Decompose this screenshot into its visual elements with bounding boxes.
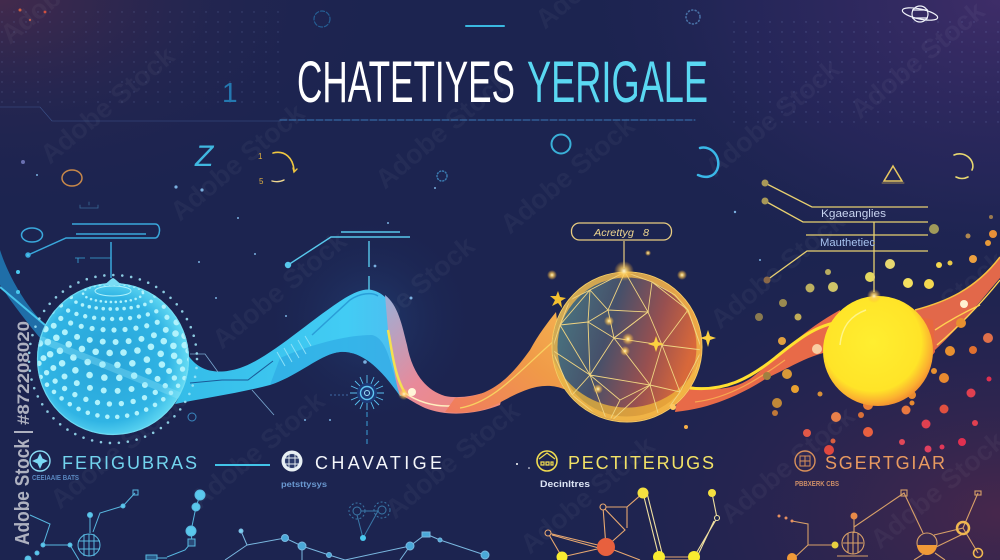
watermark: Adobe Stock [495, 110, 641, 240]
dots: around yellow sphere [755, 215, 997, 455]
icon: network globe [78, 534, 100, 556]
callout: blue sphere [22, 224, 160, 278]
watermark: Adobe Stock [165, 97, 311, 227]
label: pectiterugs: PECTITERUGS [568, 453, 714, 473]
sphere: gold geodesic globe [552, 272, 702, 424]
network: left cyan [25, 490, 138, 560]
ribbon: right tail [915, 257, 1000, 350]
label: chavatige [281, 450, 442, 489]
icon: burst marker [330, 375, 384, 445]
icon: half filled node [917, 533, 937, 555]
callout: blue wave peak [286, 232, 410, 290]
watermark: Adobe Stock [370, 65, 516, 195]
stock id side text: #872208020 [14, 321, 33, 425]
network: yellow and orange [545, 488, 720, 560]
label: sgertgiar [795, 451, 945, 488]
network: right orange [778, 490, 982, 560]
icon: sgertgiar emblem [795, 451, 815, 471]
connector between labels [215, 464, 270, 466]
floating glyphs and arcs: 1 [258, 152, 263, 161]
watermark: Adobe Stock [700, 53, 846, 183]
title: YERIGALE [527, 50, 708, 115]
callout: yellow sphere legend: Kgaeanglies [821, 208, 887, 220]
watermark: Adobe Stock [380, 395, 526, 525]
label: ferigubras [30, 451, 197, 482]
label: chavatige: CHAVATIGE [315, 453, 442, 473]
icon: pectiterugs emblem [537, 451, 557, 471]
icon: network globe orange [837, 532, 868, 556]
ribbon: orange rising wave [445, 312, 566, 413]
watermark: Adobe Stock [45, 385, 191, 515]
watermark: Adobe Stock [515, 430, 661, 560]
ribbon: pink and yellow transition [385, 295, 505, 414]
network: small triad [349, 502, 390, 541]
watermark: Adobe Stock [705, 205, 851, 335]
network: wide blue chain [225, 529, 489, 560]
title rule and header decorations: 1 [222, 77, 238, 108]
callout: gold sphere label: Acrettyg 8 [593, 228, 649, 239]
title: CHATETIYES [297, 50, 515, 115]
icon: planet [901, 5, 939, 23]
callout: yellow sphere legend: Mauthetiec [820, 237, 876, 249]
ribbon: yellow to sphere [675, 310, 845, 412]
callout: gold sphere label [572, 223, 672, 268]
ribbon: blue wave [175, 289, 420, 415]
watermark: Adobe Stock [715, 400, 861, 530]
label: pectiterugs: Decinltres [540, 479, 590, 490]
icon: ferigubras star [30, 451, 50, 471]
sphere: yellow [823, 289, 935, 406]
label: sgertgiar: SGERTGIAR [825, 453, 945, 473]
watermark: Adobe Stock [335, 230, 481, 360]
floating glyphs and arcs [62, 134, 973, 208]
stream: upper left [0, 250, 45, 338]
watermark: Adobe Stock [185, 385, 331, 515]
label: ferigubras: FERIGUBRAS [62, 453, 197, 473]
title rule and header decorations [0, 10, 700, 121]
label: sgertgiar: PBBXERK CBS [795, 481, 839, 488]
label: ferigubras: CEEIAAIE BATS [32, 475, 79, 482]
stock id side text [12, 321, 34, 545]
label: chavatige: petsttysys [281, 480, 328, 489]
scattered stars [18, 8, 761, 421]
icon: chavatige globe [282, 450, 302, 472]
network: vertical chain [146, 490, 205, 560]
label: pectiterugs [516, 451, 714, 490]
sphere: blue dotted globe [28, 274, 198, 444]
watermark: Adobe Stock [35, 40, 181, 170]
floating glyphs and arcs: 5 [259, 177, 264, 186]
callout: yellow sphere legend [762, 180, 928, 292]
floating glyphs and arcs: Z [194, 140, 215, 173]
sparkles: gold sphere [547, 250, 716, 429]
stock id side text: Adobe Stock [12, 438, 34, 545]
watermark: Adobe Stock [207, 225, 353, 355]
